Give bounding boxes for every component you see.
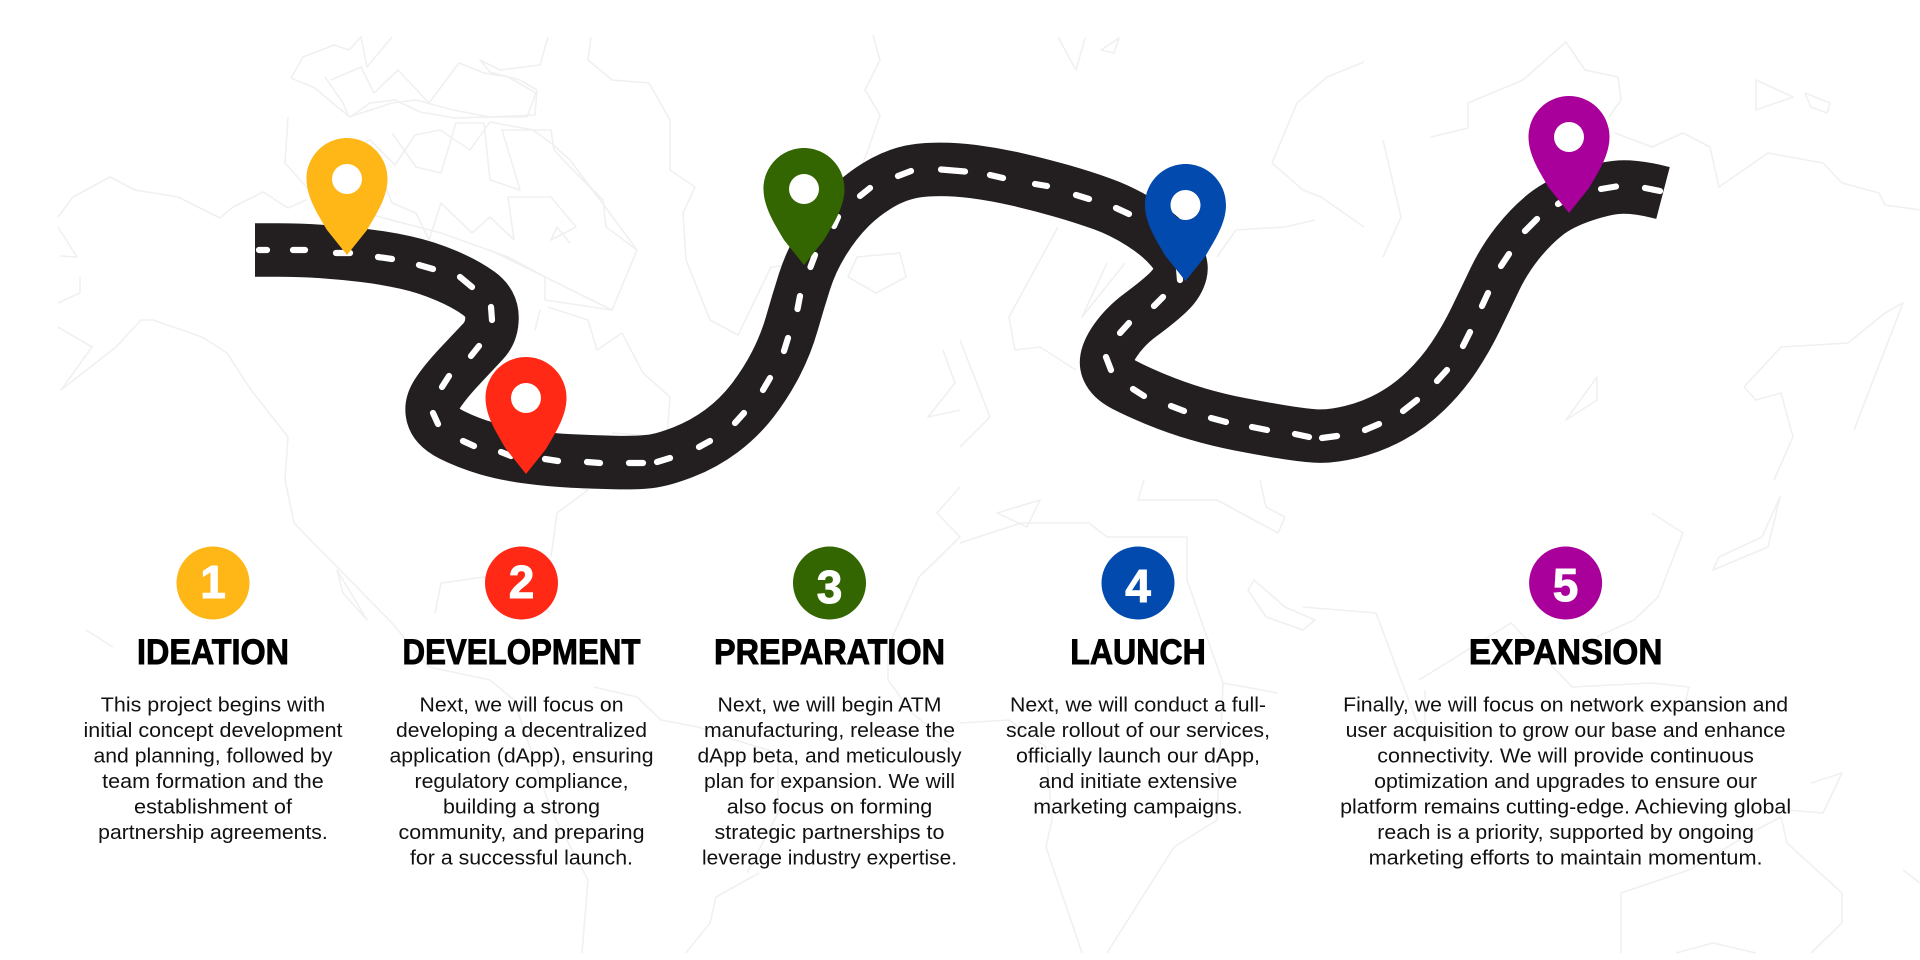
heading: ideation: IDEATION bbox=[137, 632, 289, 672]
heading: preparation: PREPARATION bbox=[714, 632, 945, 672]
number badge 5 bbox=[1529, 546, 1602, 620]
heading: launch: LAUNCH bbox=[1070, 632, 1206, 672]
text: ideation description bbox=[84, 694, 343, 844]
panel: step 4 launch bbox=[1006, 546, 1270, 818]
text: development description: community, and preparing bbox=[398, 821, 644, 844]
number badge 3: 3 bbox=[817, 561, 842, 613]
panel: step 2 development bbox=[390, 546, 654, 869]
number badge 1 bbox=[176, 546, 250, 620]
text: development description: building a strong bbox=[443, 796, 600, 818]
text: development description: Next, we will focus on bbox=[420, 694, 624, 717]
text: expansion description: marketing efforts to maintain momentum. bbox=[1369, 846, 1763, 869]
map pin 2: red bbox=[486, 357, 566, 474]
number badge 2 bbox=[485, 546, 558, 620]
text: ideation description: partnership agreements. bbox=[98, 821, 328, 844]
text: ideation description: This project begins with bbox=[101, 694, 325, 717]
map pin 3: green bbox=[764, 148, 844, 265]
map pin 5: purple bbox=[1528, 96, 1610, 213]
map pin 1: yellow bbox=[306, 138, 388, 255]
text: expansion description bbox=[1340, 694, 1791, 869]
winding road bbox=[255, 169, 1663, 463]
number badge 3 bbox=[793, 546, 866, 620]
text: development description bbox=[390, 694, 654, 869]
number badge 2: 2 bbox=[509, 556, 534, 608]
panel: step 3 preparation bbox=[698, 546, 962, 869]
text: ideation description: establishment of bbox=[134, 796, 292, 818]
number badge 5: 5 bbox=[1553, 559, 1578, 611]
panel: step 1 ideation bbox=[84, 546, 343, 844]
text: expansion description: Finally, we will focus on network expansion and bbox=[1343, 694, 1788, 717]
text: expansion description: reach is a priority, supported by ongoing bbox=[1377, 821, 1754, 844]
text: launch description: Next, we will conduct a full- bbox=[1010, 694, 1266, 717]
text: launch description bbox=[1006, 694, 1270, 818]
text: development description: regulatory compliance, bbox=[414, 770, 628, 793]
text: development description: for a successful launch. bbox=[410, 846, 633, 869]
text: preparation description bbox=[698, 694, 962, 869]
text: ideation description: and planning, followed by bbox=[94, 745, 333, 768]
text: launch description: officially launch our dApp, bbox=[1016, 745, 1260, 768]
number badge 4: 4 bbox=[1125, 560, 1151, 612]
text: preparation description: manufacturing, release the bbox=[704, 719, 955, 742]
text: expansion description: connectivity. We will provide continuous bbox=[1377, 745, 1754, 768]
text: ideation description: initial concept development bbox=[84, 719, 343, 742]
text: launch description: and initiate extensive bbox=[1039, 770, 1237, 793]
text: preparation description: leverage industry expertise. bbox=[702, 846, 957, 869]
text: expansion description: platform remains cutting-edge. Achieving global bbox=[1340, 796, 1791, 818]
road centre dashes bbox=[259, 170, 1660, 463]
text: launch description: scale rollout of our services, bbox=[1006, 719, 1270, 742]
road surface bbox=[255, 169, 1663, 463]
text: expansion description: user acquisition to grow our base and enhance bbox=[1346, 719, 1786, 742]
number badge 4 bbox=[1102, 546, 1174, 620]
text: expansion description: optimization and upgrades to ensure our bbox=[1374, 770, 1757, 793]
heading: expansion: EXPANSION bbox=[1469, 632, 1662, 672]
map pin 4: blue bbox=[1145, 164, 1226, 281]
text: development description: developing a decentralized bbox=[396, 719, 647, 742]
text: launch description: marketing campaigns. bbox=[1033, 796, 1243, 818]
text: development description: application (dApp), ensuring bbox=[390, 745, 654, 768]
text: preparation description: strategic partnerships to bbox=[714, 821, 944, 844]
text: preparation description: dApp beta, and meticulously bbox=[698, 745, 962, 768]
number badge 1: 1 bbox=[200, 556, 226, 608]
heading: development: DEVELOPMENT bbox=[402, 632, 641, 672]
panel: step 5 expansion bbox=[1340, 546, 1791, 869]
text: preparation description: plan for expansion. We will bbox=[704, 770, 955, 793]
text: preparation description: Next, we will begin ATM bbox=[718, 694, 942, 717]
text: preparation description: also focus on forming bbox=[727, 796, 932, 818]
text: ideation description: team formation and the bbox=[102, 770, 324, 793]
